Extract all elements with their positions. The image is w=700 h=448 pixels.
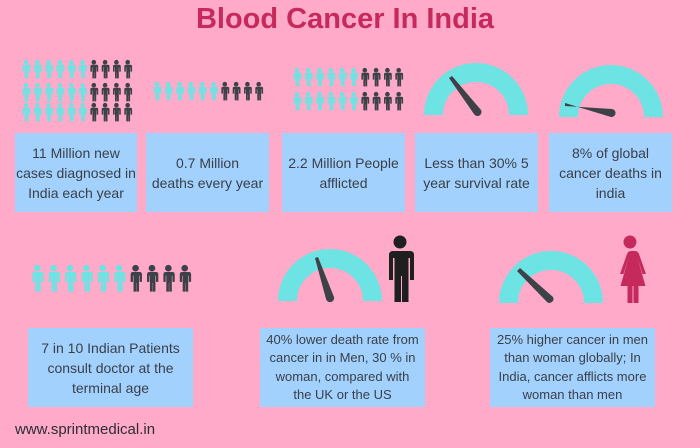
box: 7 in 10: terminal age (72, 380, 149, 396)
box: death rate (260, 328, 425, 407)
icon: woman (620, 236, 646, 303)
box: higher cancer (490, 328, 655, 407)
box: 11 million (15, 133, 137, 212)
gauge: higher cancer (508, 260, 594, 303)
box: global deaths: india (596, 184, 625, 200)
title: Blood Cancer In India (196, 3, 495, 35)
gauge: survival rate (434, 72, 518, 116)
box: 7 in 10 (28, 328, 193, 407)
box: global deaths (549, 133, 672, 212)
box: 0.7 million: 0.7 Million (176, 154, 239, 170)
gauge: death rate (288, 257, 372, 302)
box: death rate: the UK or the US (293, 387, 392, 402)
icon group: 7 in 10 (32, 265, 191, 292)
box: higher cancer: woman than men (523, 387, 622, 402)
icon group: 0.7 million (154, 82, 263, 100)
box: 2.2 million: 2.2 Million People (288, 154, 399, 170)
icon: man (389, 236, 414, 302)
box: survival: Less than 30% 5 (424, 154, 529, 170)
box: higher cancer: than woman globally; In (504, 350, 641, 365)
box: 7 in 10: consult doctor at the (47, 360, 174, 376)
box: 11 million: cases diagnosed in (16, 164, 136, 180)
box: 11 million: India each year (28, 184, 124, 200)
box: higher cancer: India, cancer afflicts more (499, 368, 646, 384)
box: death rate: 40% lower death rate from (266, 332, 419, 346)
footer: www.sprintmedical.in (15, 421, 155, 438)
box: 7 in 10: 7 in 10 Indian Patients (41, 340, 180, 356)
box: death rate: cancer in in Men, 30 % in (270, 350, 415, 365)
box: 2.2 million: afflicted (319, 174, 367, 190)
box: 0.7 million (146, 133, 269, 212)
box: higher cancer: 25% higher cancer in men (497, 332, 648, 346)
box: death rate: woman, compared with (276, 368, 409, 384)
icon group: 11 million (23, 60, 132, 121)
box: 2.2 million (282, 133, 405, 212)
box: 11 million: 11 Million new (32, 144, 120, 160)
box: 0.7 million: deaths every year (152, 174, 263, 190)
gauge: global deaths (565, 74, 654, 117)
icon group: 2.2 million (294, 68, 403, 110)
box: global deaths: 8% of global (572, 144, 649, 160)
box: survival (415, 133, 538, 212)
box: global deaths: cancer deaths in (559, 164, 662, 180)
box: survival: year survival rate (423, 174, 530, 190)
